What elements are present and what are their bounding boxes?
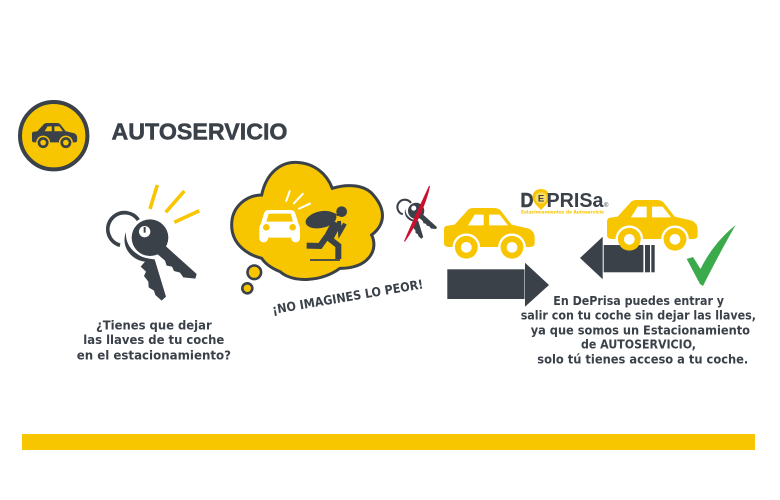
text: explanation: solo tú tienes acceso a tu coche. <box>537 352 748 366</box>
icon: yellow car <box>444 208 535 259</box>
text: explanation: En DePrisa puedes entrar y <box>553 294 724 308</box>
title: AUTOSERVICIO <box>112 118 288 144</box>
text: question: en el estacionamiento? <box>77 348 231 362</box>
logo: DePrisa: D <box>520 190 534 212</box>
text: question: ¿Tienes que dejar <box>96 318 212 332</box>
logo: DePrisa: PRISa <box>546 190 604 212</box>
text: question <box>77 318 231 362</box>
text: no imagines lo peor: ¡NO IMAGINES LO PEOR! <box>271 276 424 317</box>
logo: DePrisa: Estacionamientos de Autoservicio <box>521 210 604 216</box>
panel: header <box>20 102 288 169</box>
arrow: left <box>580 237 655 279</box>
panel: thought cloud <box>232 162 424 317</box>
footer bar <box>22 434 755 450</box>
logo: DePrisa <box>520 189 609 216</box>
text: question: las llaves de tu coche <box>83 333 224 347</box>
cloud shape <box>232 162 382 279</box>
thought bubbles <box>242 266 261 293</box>
icon: white car front <box>259 210 300 242</box>
icon: alarm rays <box>286 190 311 209</box>
icon: large keys <box>108 213 197 301</box>
text: explanation: de AUTOSERVICIO, <box>581 337 696 351</box>
logo: DePrisa: ® <box>604 202 609 209</box>
icon: car badge <box>20 102 87 169</box>
arrow: right <box>447 263 549 307</box>
icon: yellow shine rays <box>150 185 199 222</box>
icon: map pin: E <box>538 194 544 204</box>
icon: green check mark <box>687 225 736 286</box>
icon: crossed out keys <box>397 186 437 242</box>
panel: keys question <box>77 185 231 362</box>
icon: second yellow car <box>607 200 698 252</box>
text: explanation: ya que somos un Estacionamiento <box>531 323 750 337</box>
text: explanation: salir con tu coche sin dejar las llaves, <box>521 309 756 323</box>
icon: thief <box>304 206 347 260</box>
text: explanation <box>521 294 756 366</box>
